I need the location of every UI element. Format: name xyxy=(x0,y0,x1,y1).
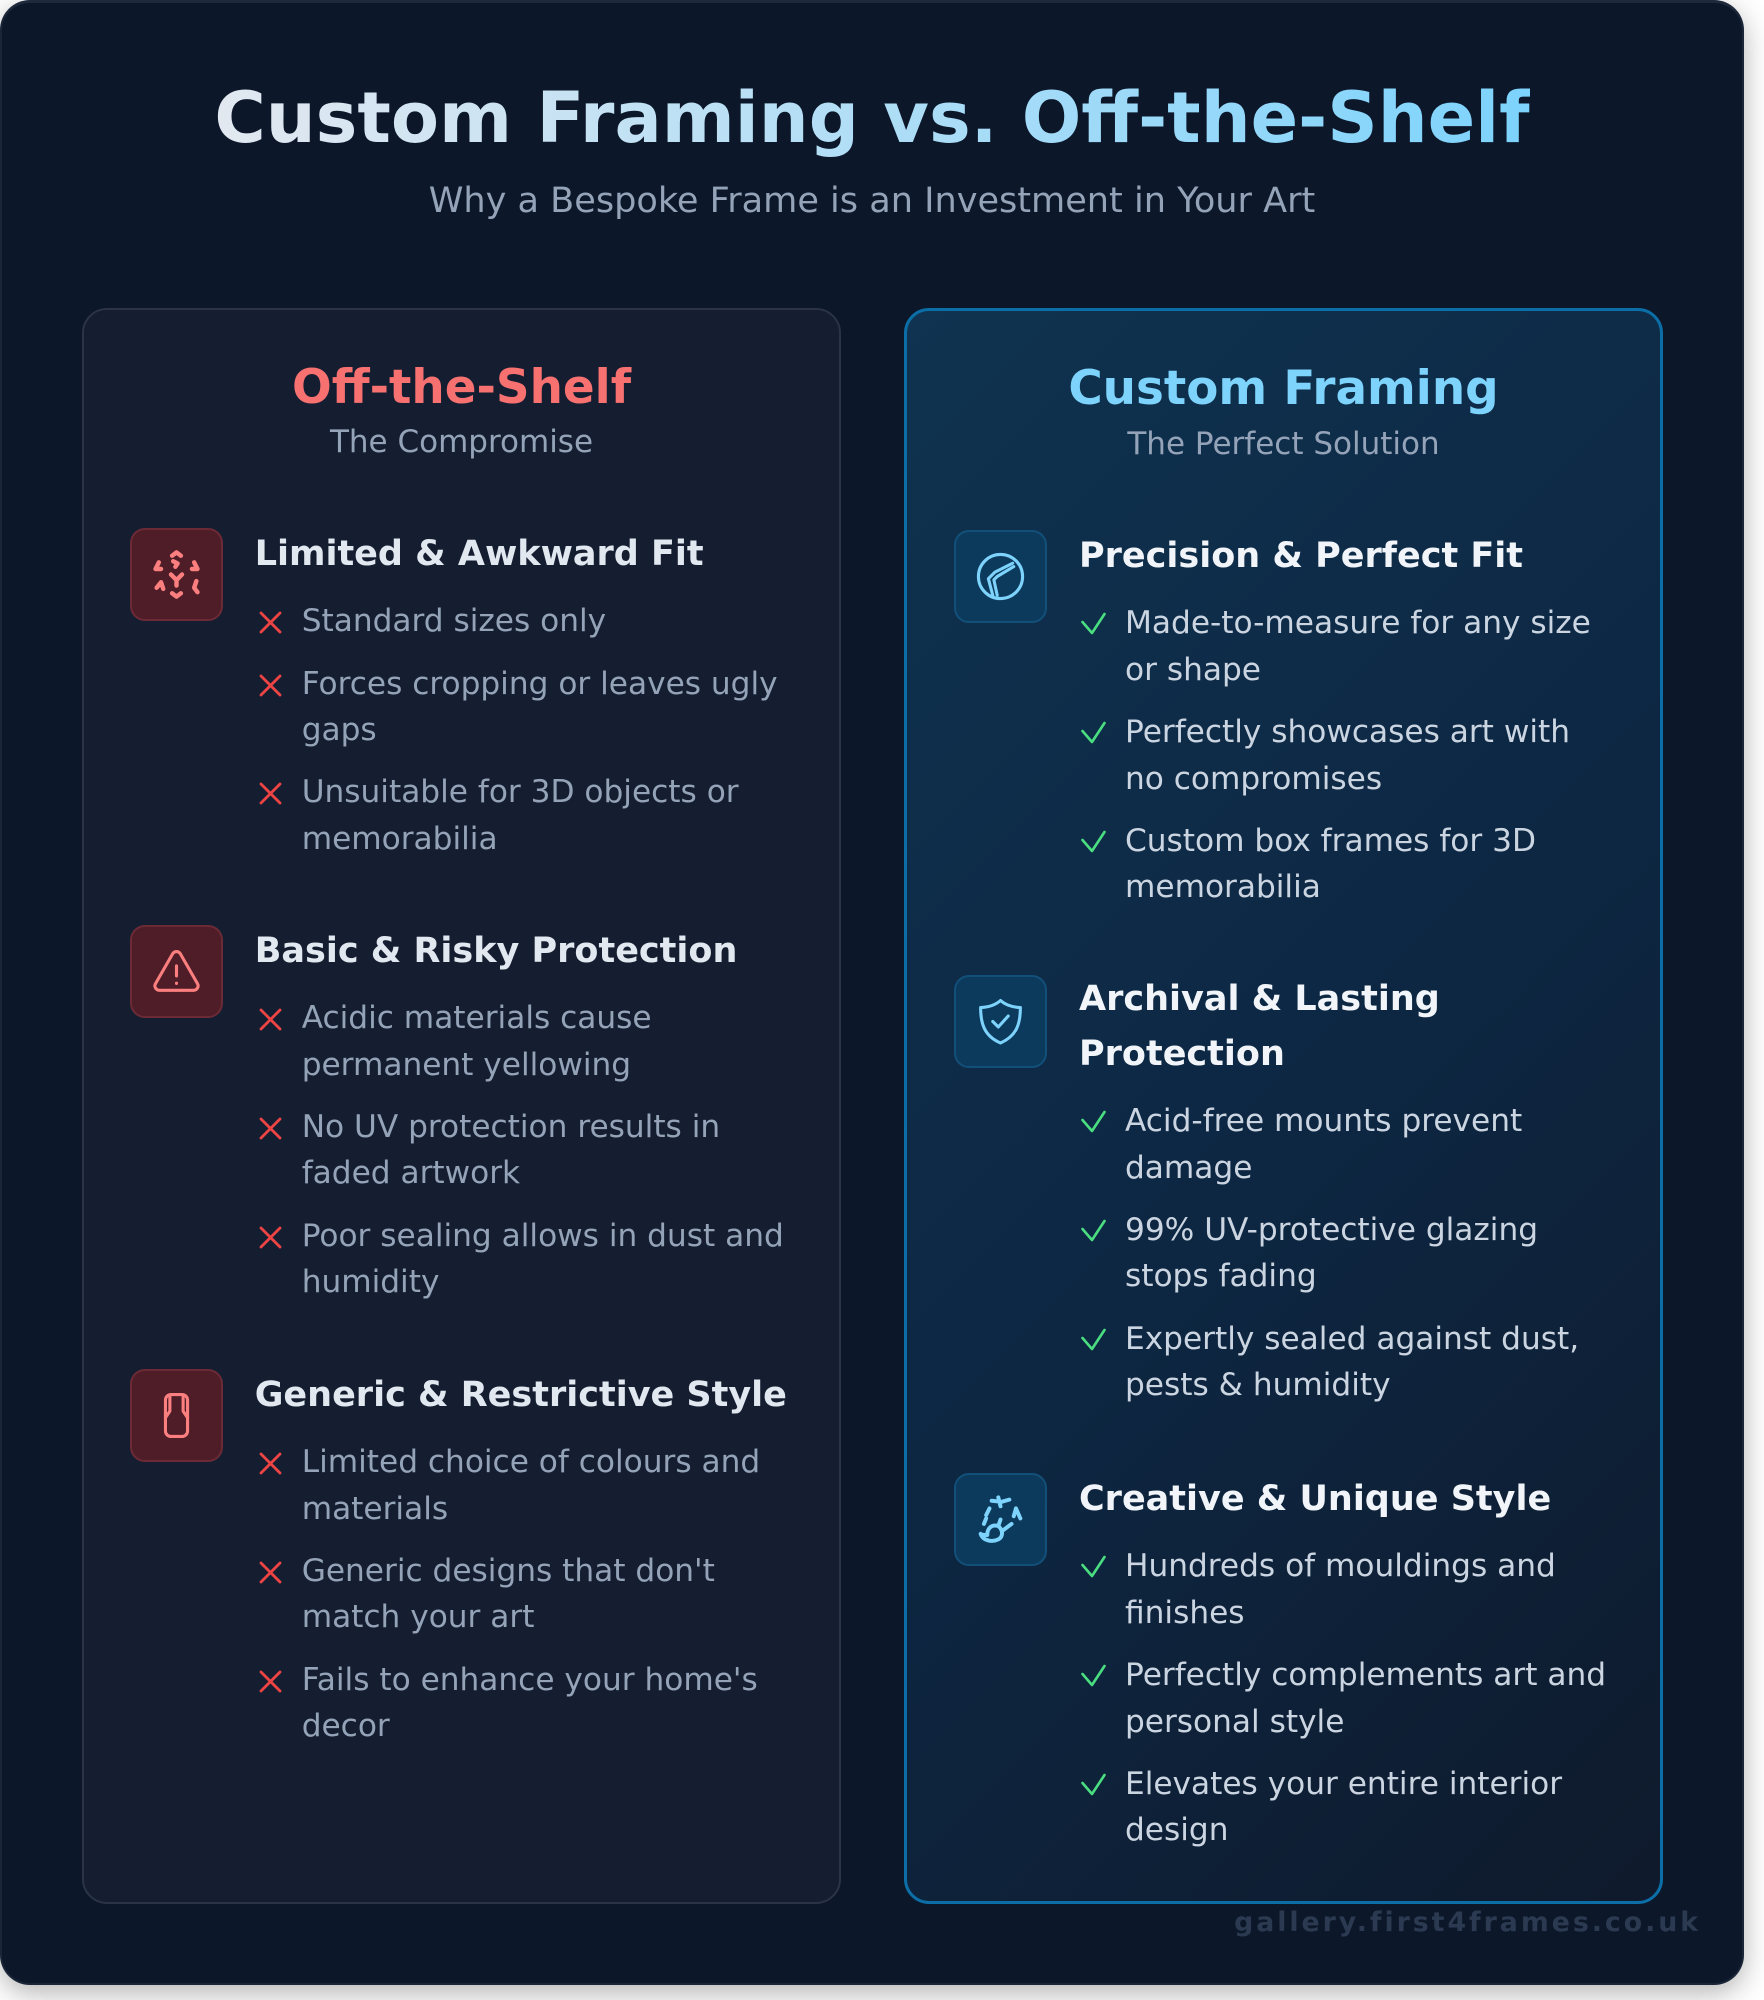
bullet list: Hundreds of mouldings and xyxy=(1125,1548,1556,1584)
bullet list: stops fading xyxy=(1125,1258,1317,1294)
item: limited and awkward fit xyxy=(130,528,778,857)
bullet list: gaps xyxy=(302,712,377,748)
bullet list: faded artwork xyxy=(302,1155,520,1191)
bullet list xyxy=(260,1000,784,1300)
panel heading: off-the-shelf: Off-the-Shelf xyxy=(292,361,631,415)
title: Custom Framing vs. Off-the-Shelf xyxy=(214,77,1530,159)
item title: Generic & Restrictive Style xyxy=(255,1375,787,1415)
bullet list: design xyxy=(1125,1812,1228,1848)
bullet list xyxy=(1081,1548,1606,1848)
bullet list: or shape xyxy=(1125,652,1261,688)
bullet list: damage xyxy=(1125,1150,1252,1186)
item title: Limited & Awkward Fit xyxy=(255,534,704,574)
item title: Protection xyxy=(1079,1034,1285,1074)
bullet list: Fails to enhance your home's xyxy=(302,1662,758,1698)
bullet list: humidity xyxy=(302,1264,439,1300)
icon: circle with corner xyxy=(954,530,1047,623)
bullet list: Acidic materials cause xyxy=(302,1000,652,1036)
item title xyxy=(1079,979,1440,1074)
bullet list: Perfectly showcases art with xyxy=(1125,714,1570,750)
bullet list: pests & humidity xyxy=(1125,1367,1391,1403)
panel: off-the-shelf xyxy=(82,308,841,1904)
panel heading: custom framing: Custom Framing xyxy=(1068,362,1499,416)
panel subheading: the perfect solution: The Perfect Solution xyxy=(1127,426,1440,462)
bullet list: permanent yellowing xyxy=(302,1046,631,1082)
bullet list: Made-to-measure for any size xyxy=(1125,605,1591,641)
bullet list: finishes xyxy=(1125,1595,1245,1631)
bullet list: Acid-free mounts prevent xyxy=(1125,1103,1522,1139)
item: creative and unique style xyxy=(954,1473,1606,1848)
bullet list: Unsuitable for 3D objects or xyxy=(302,774,739,810)
bullet list: Poor sealing allows in dust and xyxy=(302,1218,784,1254)
item title: Creative & Unique Style xyxy=(1079,1479,1551,1519)
bullet list: Forces cropping or leaves ugly xyxy=(302,666,778,702)
bullet list xyxy=(1081,1103,1579,1403)
subtitle: Why a Bespoke Frame is an Investment in Your Art xyxy=(429,180,1315,221)
bullet list: memorabilia xyxy=(1125,869,1321,905)
bullet list: Generic designs that don't xyxy=(302,1553,715,1589)
bullet list xyxy=(1081,605,1591,905)
bullet list: match your art xyxy=(302,1599,534,1635)
bullet list: no compromises xyxy=(1125,761,1382,797)
item title: Archival & Lasting xyxy=(1079,979,1440,1019)
panel: custom framing xyxy=(904,308,1663,1904)
icon: shield with check xyxy=(954,975,1047,1068)
item: precision and perfect fit xyxy=(954,530,1591,905)
watermark: gallery.first4frames.co.uk xyxy=(1234,1907,1701,1938)
bullet list: Limited choice of colours and xyxy=(302,1444,760,1480)
icon: bottle xyxy=(130,1369,223,1462)
bullet list: Standard sizes only xyxy=(302,603,606,639)
bullet list: No UV protection results in xyxy=(302,1109,720,1145)
bullet list: personal style xyxy=(1125,1704,1344,1740)
bullet list xyxy=(260,1444,760,1744)
bullet list: materials xyxy=(302,1490,448,1526)
item: generic and restrictive style xyxy=(130,1369,787,1744)
icon: brush strokes xyxy=(954,1473,1047,1566)
panel subheading: the compromise: The Compromise xyxy=(330,424,593,460)
icon: scattered arrows xyxy=(130,528,223,621)
bullet list: 99% UV-protective glazing xyxy=(1125,1212,1538,1248)
bullet list: memorabilia xyxy=(302,821,498,857)
item title: Basic & Risky Protection xyxy=(255,931,737,971)
item: basic and risky protection xyxy=(130,925,784,1300)
item: archival and lasting protection xyxy=(954,975,1579,1403)
bullet list xyxy=(260,603,778,857)
icon: warning triangle xyxy=(130,925,223,1018)
bullet list: Perfectly complements art and xyxy=(1125,1657,1606,1693)
bullet list: decor xyxy=(302,1708,390,1744)
item title: Precision & Perfect Fit xyxy=(1079,536,1523,576)
bullet list: Custom box frames for 3D xyxy=(1125,823,1536,859)
bullet list: Expertly sealed against dust, xyxy=(1125,1321,1579,1357)
bullet list: Elevates your entire interior xyxy=(1125,1766,1562,1802)
